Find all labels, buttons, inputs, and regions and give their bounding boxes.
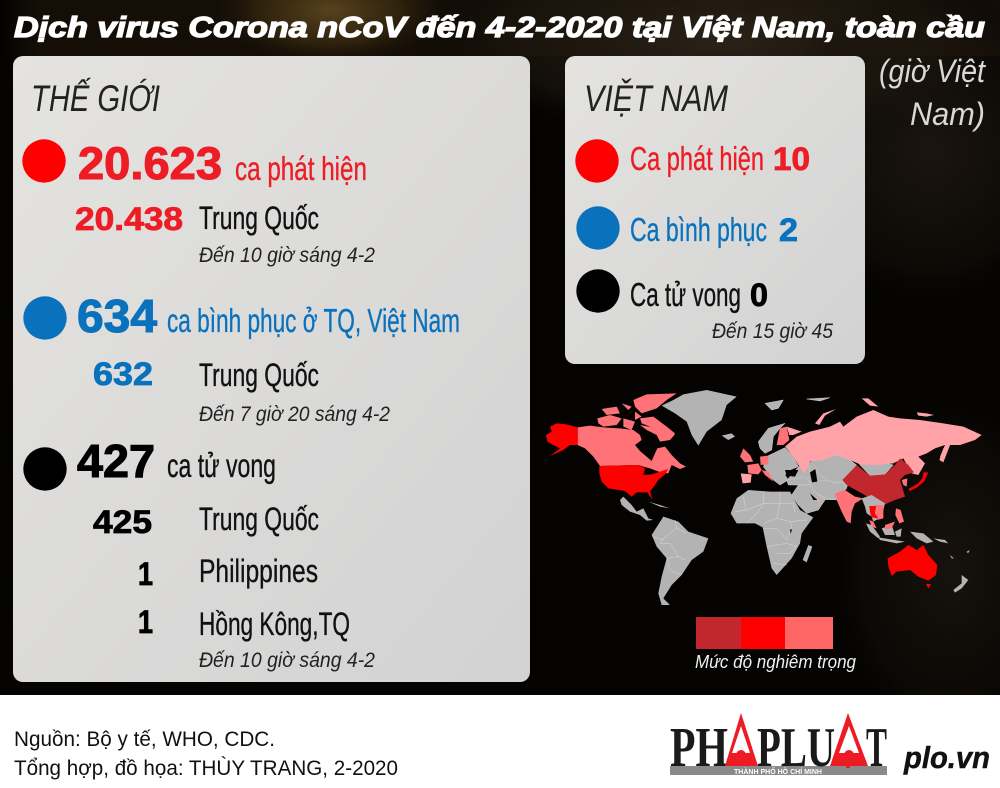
world map bbox=[546, 390, 982, 605]
time zone note: (giờ Việt bbox=[879, 53, 986, 89]
icon: red dot bbox=[22, 139, 66, 183]
legend scale bbox=[696, 617, 833, 649]
source text: Nguồn: Bộ y tế, WHO, CDC. bbox=[14, 728, 275, 751]
vietnam timestamp: Đến 15 giờ 45 bbox=[712, 320, 833, 343]
philippines label: Philippines bbox=[199, 553, 318, 589]
source text: Tổng hợp, đồ họa: THÙY TRANG, 2-2020 bbox=[14, 757, 398, 780]
total deaths number: 427 bbox=[77, 435, 155, 487]
logo: pháp luật bbox=[670, 713, 887, 779]
china deaths label: Trung Quốc bbox=[199, 501, 319, 537]
north america bbox=[546, 390, 737, 500]
china cases number: 20.438 bbox=[75, 201, 183, 237]
total deaths label: ca tử vong bbox=[167, 447, 276, 484]
site name: plo.vn bbox=[903, 740, 990, 775]
logo: pháp luật: T bbox=[866, 717, 887, 779]
icon: black dot bbox=[576, 269, 620, 313]
recovered timestamp: Đến 7 giờ 20 sáng 4-2 bbox=[199, 403, 390, 426]
total cases number: 20.623 bbox=[78, 138, 222, 189]
vietnam recovered: Ca bình phục bbox=[630, 211, 767, 248]
hong kong label: Hồng Kông,TQ bbox=[199, 606, 350, 642]
logo: pháp luật: PLU bbox=[757, 717, 835, 779]
hong kong deaths number: 1 bbox=[138, 604, 153, 640]
china recovered label: Trung Quốc bbox=[199, 357, 319, 393]
icon: blue dot bbox=[576, 206, 620, 250]
vietnam cases: Ca phát hiện bbox=[630, 140, 764, 177]
time zone note bbox=[879, 53, 986, 132]
deaths block bbox=[23, 435, 375, 672]
cases block bbox=[22, 138, 375, 267]
vietnam deaths: Ca tử vong bbox=[630, 276, 741, 313]
panel: việt nam bbox=[565, 56, 865, 364]
total cases label: ca phát hiện bbox=[235, 150, 367, 187]
americas south and africa bbox=[620, 490, 813, 605]
vietnam deaths: 0 bbox=[750, 277, 768, 313]
vietnam recovered: 2 bbox=[779, 212, 798, 248]
china deaths number: 425 bbox=[93, 504, 152, 540]
footer bbox=[0, 695, 1000, 788]
icon: blue dot bbox=[23, 296, 67, 340]
vietnam cases: 10 bbox=[773, 141, 810, 177]
title: Dịch virus Corona nCoV đến 4-2-2020 tại Việt Nam, toàn cầu bbox=[14, 12, 985, 44]
total recovered label: ca bình phục ở TQ, Việt Nam bbox=[167, 302, 460, 339]
eurasia bbox=[740, 398, 982, 513]
china cases label: Trung Quốc bbox=[199, 200, 319, 236]
source text bbox=[14, 728, 398, 780]
time zone note: Nam) bbox=[910, 96, 985, 132]
heading: việt nam: VIỆT NAM bbox=[584, 78, 728, 119]
cases timestamp: Đến 10 giờ sáng 4-2 bbox=[199, 244, 375, 267]
total recovered number: 634 bbox=[77, 290, 157, 342]
recovered block bbox=[23, 290, 460, 426]
china recovered number: 632 bbox=[93, 356, 153, 392]
logo: pháp luật: Á bbox=[729, 752, 755, 769]
asia pacific bbox=[835, 490, 970, 593]
deaths timestamp: Đến 10 giờ sáng 4-2 bbox=[199, 649, 375, 672]
heading: thế giới: THẾ GIỚI bbox=[31, 77, 160, 119]
panel: thế giới bbox=[13, 56, 530, 682]
philippines deaths number: 1 bbox=[138, 556, 153, 592]
logo: pháp luật: PH bbox=[670, 717, 728, 779]
legend label: Mức độ nghiêm trọng bbox=[695, 652, 856, 672]
legend bbox=[695, 617, 856, 672]
logo: pháp luật: THÀNH PHỐ HỒ CHÍ MINH bbox=[734, 766, 822, 776]
icon: red dot bbox=[575, 139, 619, 183]
logo: pháp luật: Ậ bbox=[838, 752, 862, 769]
country borders bbox=[653, 492, 807, 575]
icon: black dot bbox=[23, 447, 67, 491]
